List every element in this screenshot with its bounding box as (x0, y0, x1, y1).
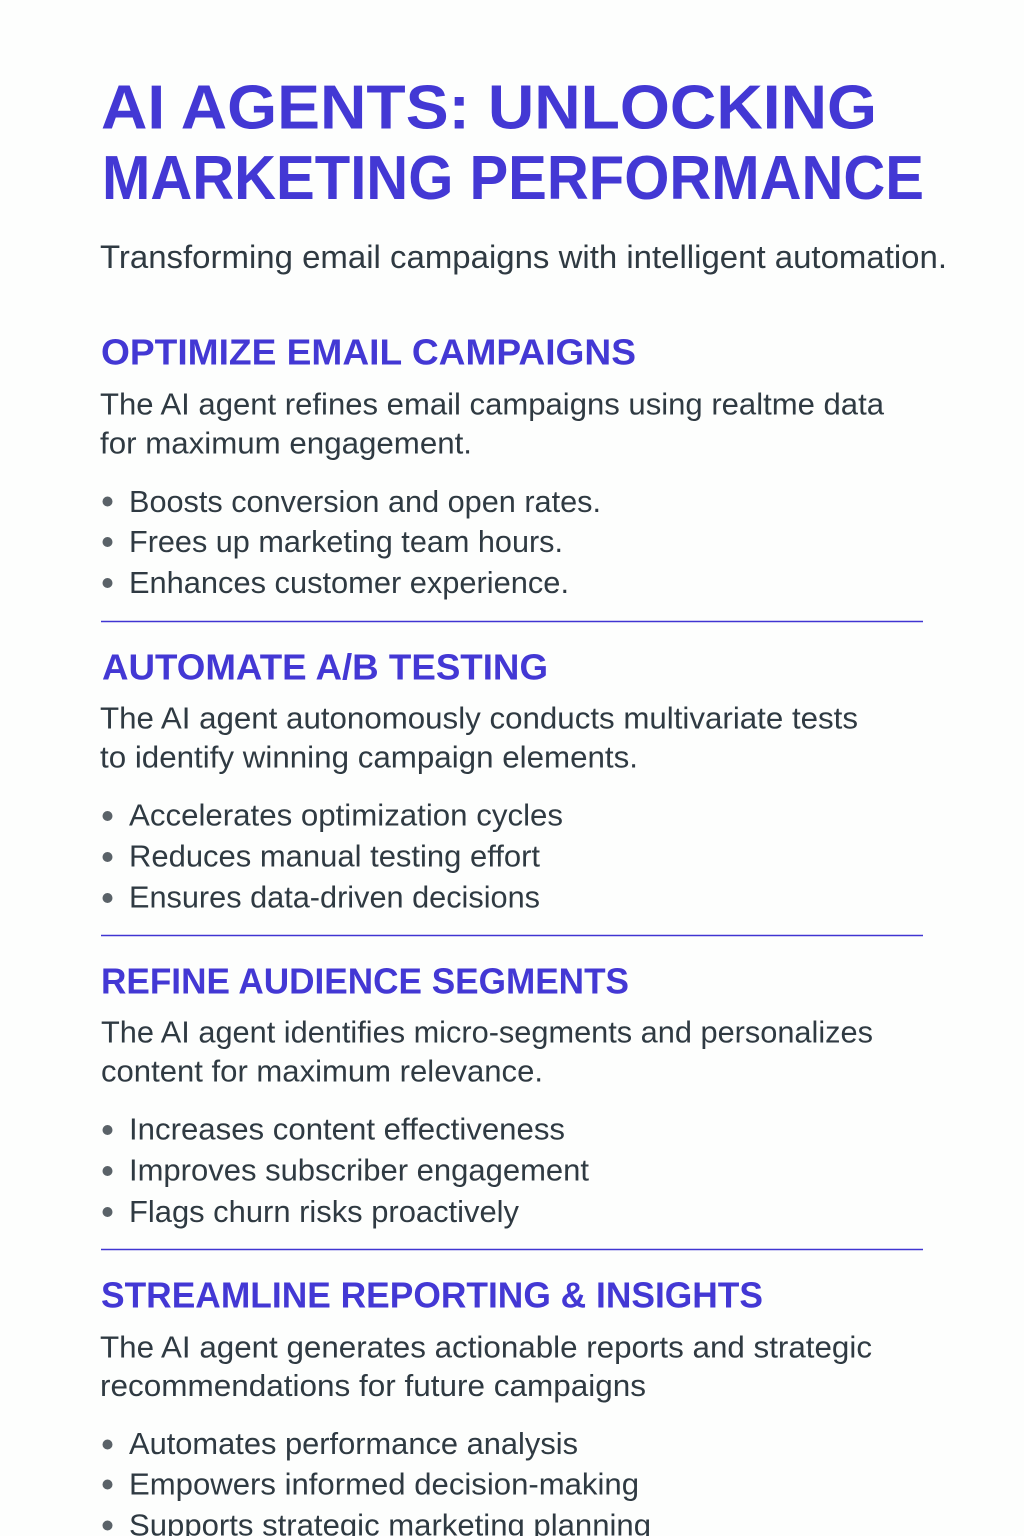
bullet list (102, 1112, 589, 1229)
panel: automate a/b testing (100, 646, 858, 914)
description (100, 386, 885, 460)
bullet list: Increases content effectiveness (129, 1112, 565, 1146)
description: recommendations for future campaigns (100, 1368, 646, 1403)
bullet list (102, 1426, 651, 1536)
panel: refine audience segments (101, 960, 873, 1229)
bullet list: Ensures data-driven decisions (129, 880, 540, 914)
bullet list: Automates performance analysis (129, 1426, 578, 1461)
panel: optimize email campaigns (100, 332, 885, 600)
bullet list: Reduces manual testing effort (129, 838, 540, 874)
bullet list: Enhances customer experience. (129, 565, 569, 600)
subtitle: Transforming email campaigns with intelligent automation. (100, 239, 947, 275)
title (101, 74, 924, 213)
heading: REFINE AUDIENCE SEGMENTS (101, 960, 629, 1002)
description: The AI agent identifies micro-segments and personalizes (101, 1014, 873, 1050)
description (101, 1014, 873, 1088)
bullet list: Frees up marketing team hours. (129, 524, 563, 559)
title: AI AGENTS: UNLOCKING (101, 74, 877, 142)
bullet list: Boosts conversion and open rates. (129, 484, 601, 519)
title: MARKETING PERFORMANCE (102, 144, 924, 213)
description: to identify winning campaign elements. (100, 740, 638, 774)
bullet list: Flags churn risks proactively (129, 1194, 519, 1229)
description (100, 700, 858, 774)
description: The AI agent autonomously conducts multivariate tests (100, 700, 858, 736)
bullet list: Improves subscriber engagement (129, 1152, 589, 1188)
bullet list: Empowers informed decision-making (129, 1466, 639, 1502)
bullet list: Accelerates optimization cycles (129, 798, 563, 832)
description: content for maximum relevance. (101, 1054, 543, 1088)
description: The AI agent generates actionable reports and strategic (100, 1330, 872, 1364)
panel: streamline reporting and insights (100, 1274, 872, 1536)
description: The AI agent refines email campaigns using realtme data (100, 386, 885, 422)
heading: AUTOMATE A/B TESTING (102, 646, 548, 688)
description: for maximum engagement. (100, 426, 472, 460)
bullet list (102, 484, 601, 600)
heading: STREAMLINE REPORTING & INSIGHTS (101, 1274, 763, 1316)
heading: OPTIMIZE EMAIL CAMPAIGNS (101, 332, 636, 372)
description (100, 1330, 872, 1403)
bullet list (102, 798, 563, 914)
